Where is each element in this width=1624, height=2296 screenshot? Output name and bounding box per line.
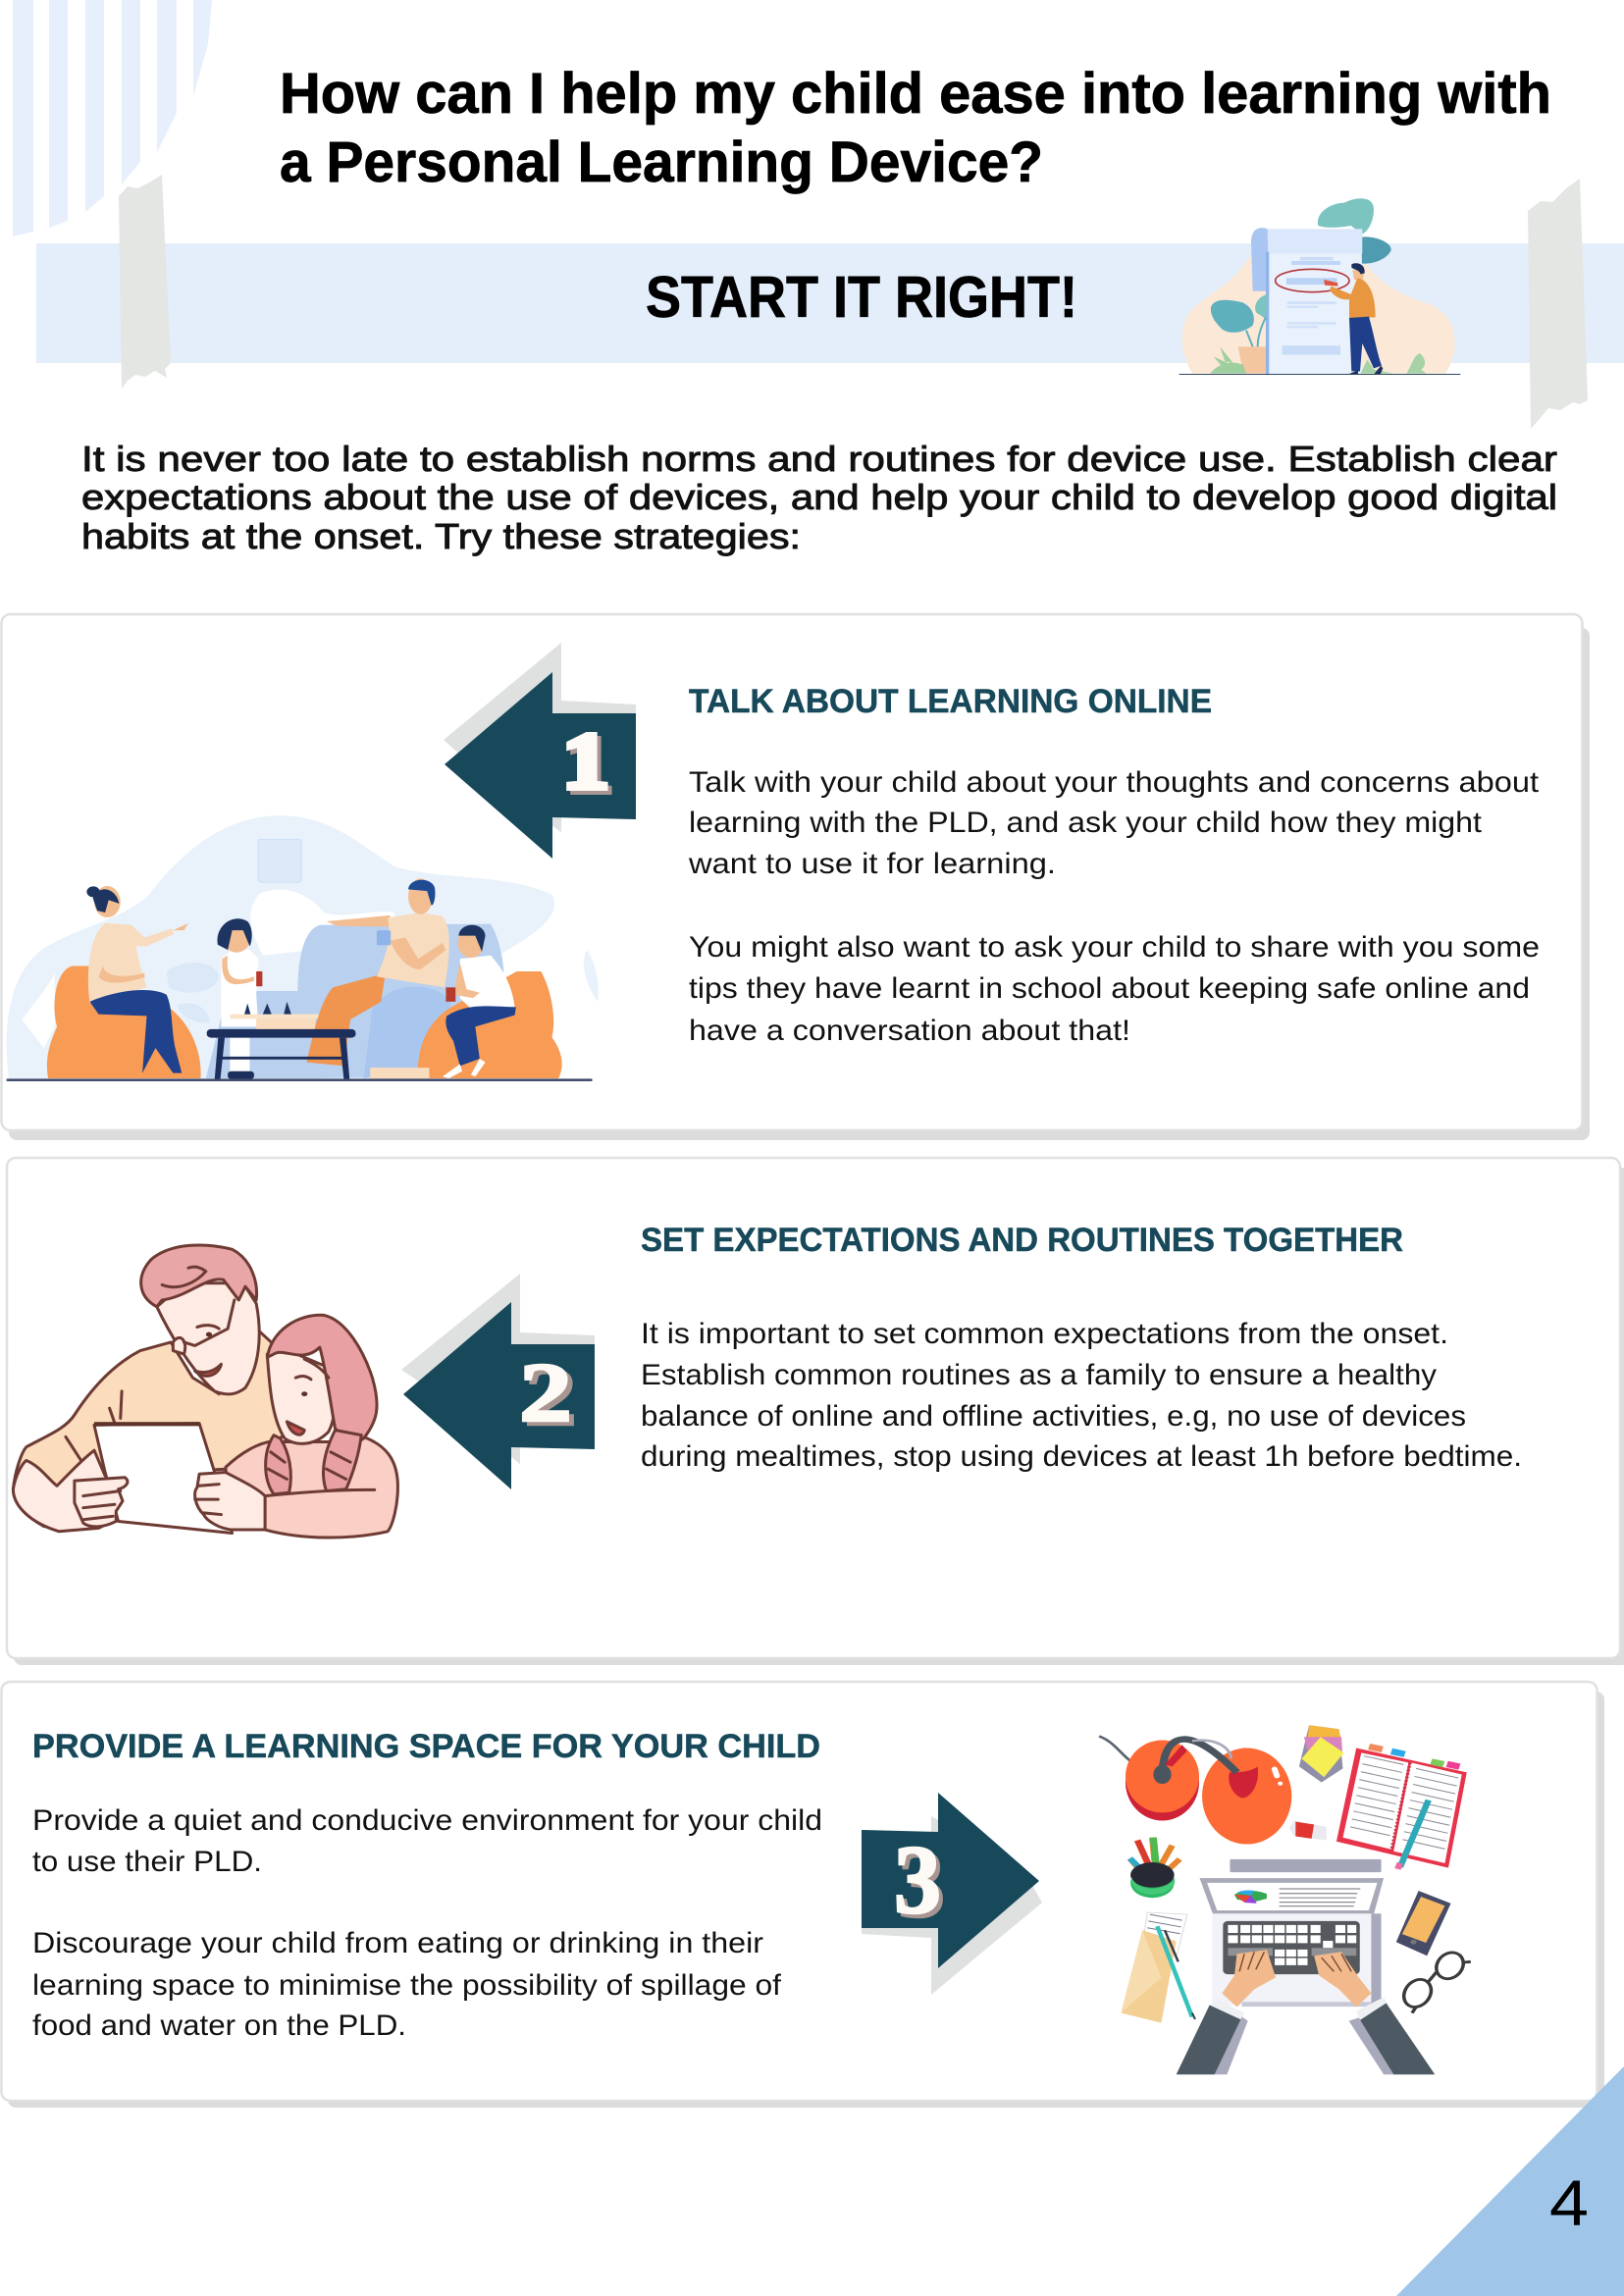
heading 1: TALK ABOUT LEARNING ONLINE	[689, 683, 1212, 720]
number 1: 1	[562, 716, 609, 806]
body text 1: have a conversation about that!	[689, 1015, 1130, 1047]
number 1: 1	[566, 720, 613, 809]
number 2: 2	[519, 1345, 572, 1439]
panel: provide a learning space	[2, 1682, 1604, 2108]
panel: talk about learning online	[2, 614, 1590, 1140]
panel text 1	[688, 683, 1540, 1047]
arrow 3	[862, 1793, 1042, 1995]
body text 2: Establish common routines as a family to ensure a healthy	[641, 1359, 1437, 1391]
body text 1: learning with the PLD, and ask your child how they might	[689, 807, 1483, 839]
body text 1: You might also want to ask your child to share with you some	[689, 931, 1540, 964]
body text 2: balance of online and offline activities, e.g, no use of devices	[641, 1400, 1466, 1433]
heading 2: SET EXPECTATIONS AND ROUTINES TOGETHER	[641, 1222, 1403, 1259]
intro text: expectations about the use of devices, and help your child to develop good digital	[81, 477, 1557, 517]
illustration: parent and child with tablet	[13, 1245, 397, 1538]
body text 2: during mealtimes, stop using devices at least 1h before bedtime.	[641, 1440, 1522, 1473]
number 3: 3	[894, 1825, 941, 1934]
banner	[36, 243, 1624, 363]
number 2	[519, 1345, 577, 1443]
panel text 2	[641, 1222, 1522, 1473]
body text 3: Provide a quiet and conducive environment for your child	[32, 1804, 822, 1837]
title	[280, 62, 1551, 194]
body text 3: learning space to minimise the possibility of spillage of	[32, 1969, 782, 2002]
arrow 2	[401, 1274, 595, 1489]
banner heading: START IT RIGHT!	[646, 265, 1077, 330]
illustration: desk with laptop	[1099, 1725, 1471, 2074]
body text 3: food and water on the PLD.	[32, 2009, 406, 2042]
body text 3: to use their PLD.	[32, 1846, 262, 1878]
body text 3	[32, 1804, 822, 2042]
intro text	[81, 439, 1557, 556]
icon: person reading a checklist	[1179, 198, 1460, 375]
number 2: 2	[524, 1349, 577, 1443]
intro text: habits at the onset. Try these strategies:	[81, 516, 801, 556]
panel: set expectations and routines together	[7, 1158, 1624, 1665]
body text 1: want to use it for learning.	[688, 848, 1056, 880]
title: How can I help my child ease into learning with	[280, 62, 1551, 126]
tape right	[1528, 179, 1588, 429]
heading 3: PROVIDE A LEARNING SPACE FOR YOUR CHILD	[32, 1728, 820, 1765]
body text 2	[641, 1318, 1522, 1473]
intro text: It is never too late to establish norms and routines for device use. Establish clear	[81, 439, 1557, 479]
body text 1: tips they have learnt in school about keeping safe online and	[689, 972, 1530, 1005]
body text 3: Discourage your child from eating or drinking in their	[32, 1927, 763, 1959]
body text 1: Talk with your child about your thoughts and concerns about	[689, 766, 1540, 799]
number 3: 3	[898, 1829, 945, 1938]
arrow 1	[444, 643, 636, 859]
page number: 4	[1549, 2166, 1589, 2239]
title: a Personal Learning Device?	[280, 130, 1043, 194]
body text 1	[688, 766, 1540, 1047]
body text 2: It is important to set common expectations from the onset.	[641, 1318, 1448, 1350]
tape left	[119, 175, 171, 389]
page corner triangle	[1396, 2066, 1624, 2296]
illustration: family talking	[7, 815, 599, 1081]
